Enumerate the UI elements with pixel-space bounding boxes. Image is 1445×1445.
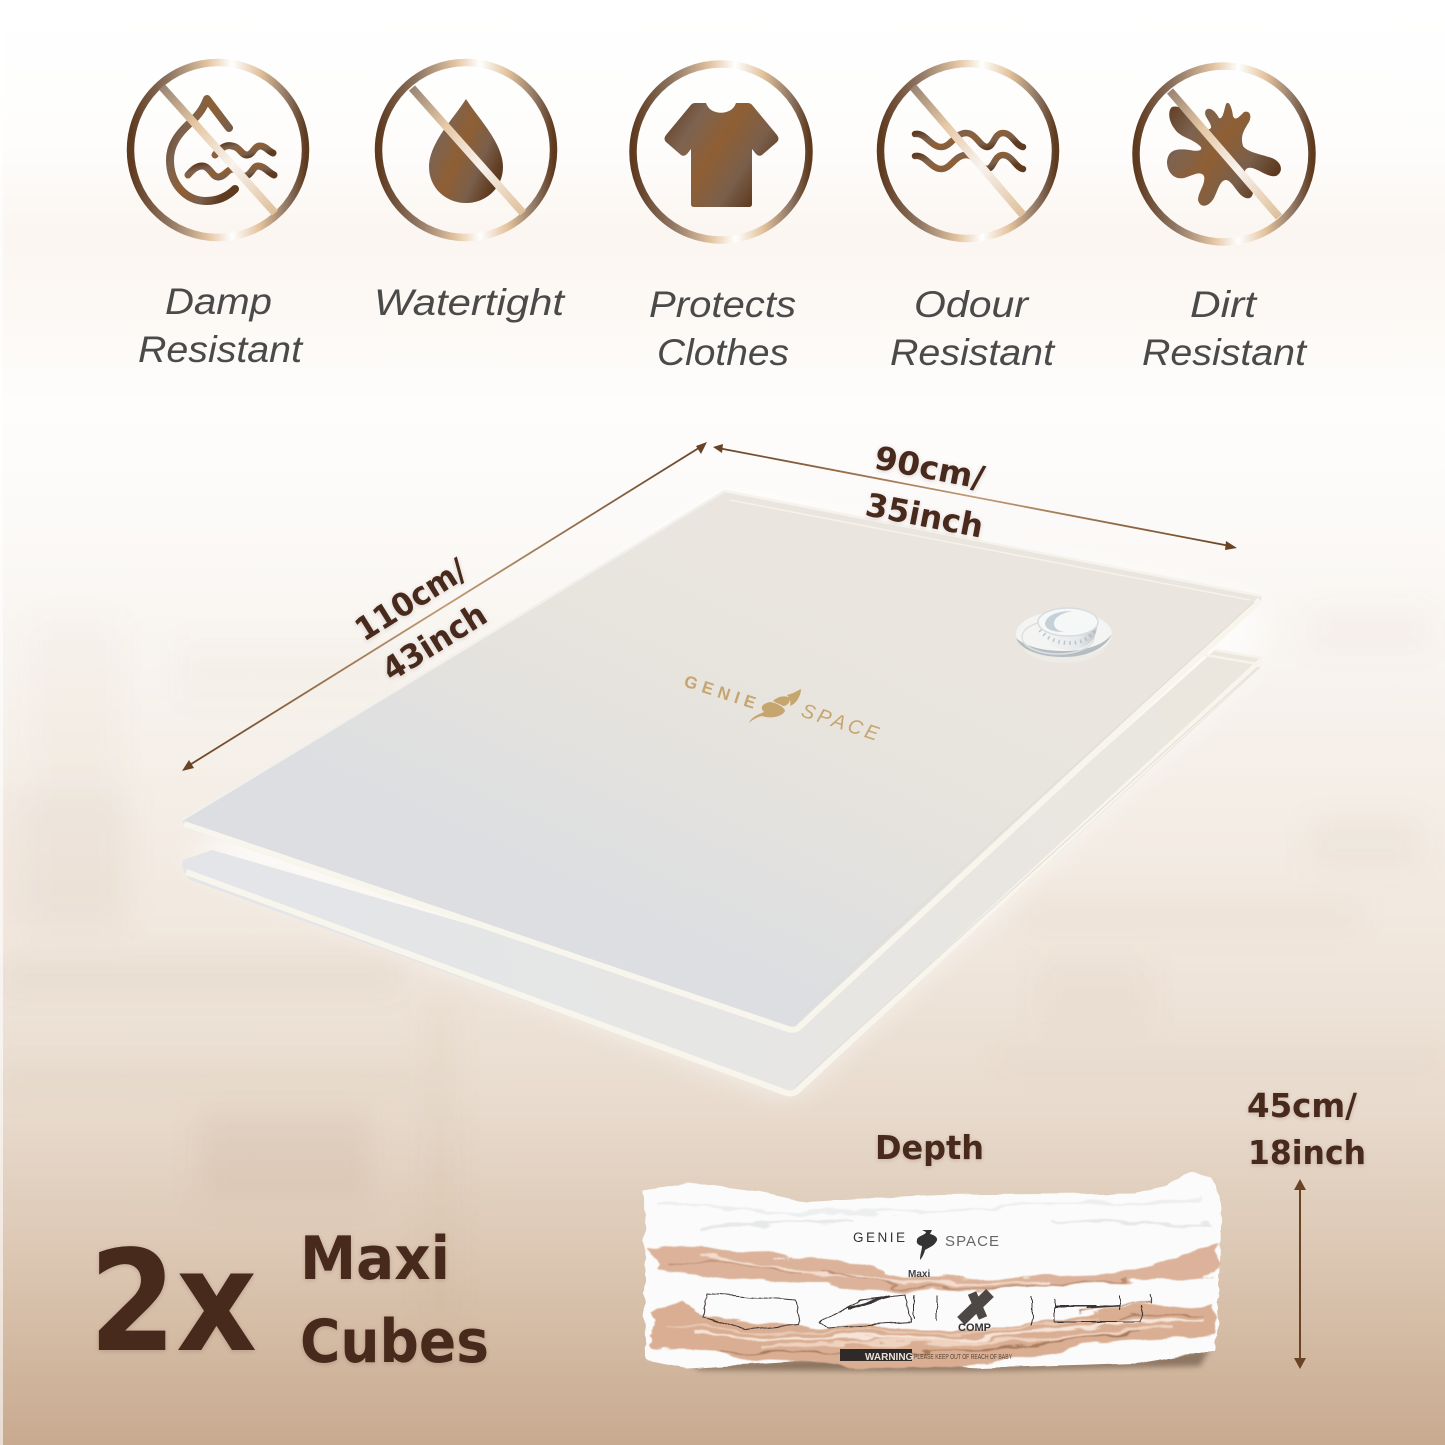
label: damp resistant: Damp [165,281,272,322]
icon: damp resistant [130,62,306,238]
lower vacuum bag sheet [182,650,1262,1096]
warning label: PLEASE KEEP OUT OF REACH OF BABY [914,1354,1012,1361]
upper vacuum bag sheet [182,491,1262,1032]
label: dirt resistant: Dirt [1190,284,1258,325]
dimension label: 110cm/43inch: 110cm/ [348,551,474,649]
valve [1016,608,1112,663]
X mark [961,1293,990,1321]
icon: odour resistant [880,64,1056,238]
warning label: WARNING [865,1352,914,1363]
label: 45cm/18inch [1247,1086,1366,1172]
heading: Maxi Cubes: Maxi [300,1224,450,1294]
label: damp resistant: Resistant [138,329,304,370]
dimension label: 90cm/35inch: 90cm/ [871,439,988,497]
brand logo on bag [682,672,882,746]
dimension label: 90cm/35inch [862,439,988,546]
depth arrow [1294,1179,1306,1369]
label: dirt resistant [1142,284,1308,373]
icon: protects clothes [633,64,809,240]
dimension label: 110cm/43inch [348,551,494,689]
brand logo on package [853,1230,999,1260]
width arrow: 90cm [713,444,1237,550]
label: odour resistant [890,284,1056,373]
label: depth: Depth [875,1128,984,1167]
label: protects clothes [649,284,796,373]
label: watertight: Watertight [374,282,566,323]
icon: watertight [378,62,554,238]
compressed cube package: COMP [958,1322,991,1334]
label: odour resistant: Odour [914,284,1030,325]
brand logo on package: GENIE [853,1230,905,1245]
label: protects clothes: Protects [649,284,796,325]
length arrow: 110cm [182,442,707,771]
heading: Maxi Cubes: Cubes [300,1307,489,1377]
label: 45cm/18inch: 45cm/ [1247,1086,1358,1125]
label: odour resistant: Resistant [890,332,1056,373]
heading: Maxi Cubes [300,1224,489,1377]
brand logo on bag: SPACE [798,700,882,746]
icon: dirt resistant [1136,66,1312,242]
warning label [840,1349,1012,1363]
dimension label: 110cm/43inch: 43inch [375,595,494,689]
heading: 2x: 2x [89,1221,257,1384]
label: damp resistant [138,281,304,370]
label: dirt resistant: Resistant [1142,332,1308,373]
small print: Maxi [908,1269,930,1280]
dimension label: 90cm/35inch: 35inch [862,486,987,546]
brand logo on bag: GENIE [682,672,758,713]
label: 45cm/18inch: 18inch [1248,1133,1366,1172]
compressed cube package [644,1173,1221,1371]
sheet glow [183,492,1262,1096]
label: protects clothes: Clothes [657,332,789,373]
brand logo on package: SPACE [945,1233,999,1250]
